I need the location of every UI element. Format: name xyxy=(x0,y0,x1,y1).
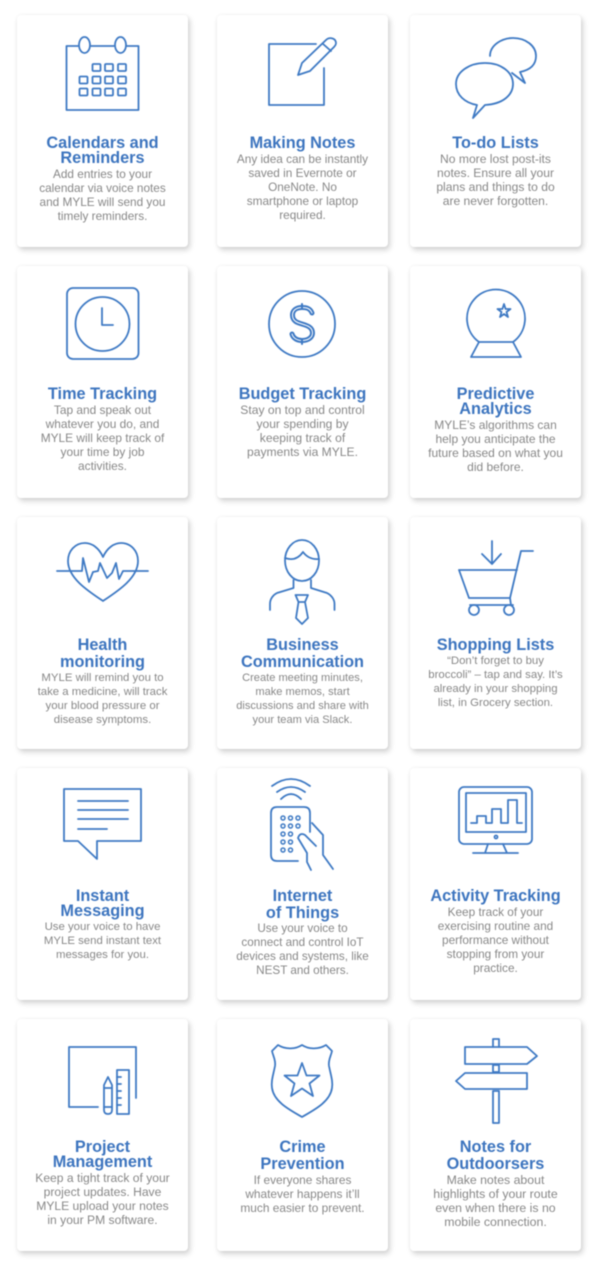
heading: Activity Tracking xyxy=(430,887,561,905)
panel: health monitoring xyxy=(17,517,188,749)
icon: clock xyxy=(65,286,140,361)
heading: Reminders xyxy=(60,149,145,167)
panel: project management xyxy=(17,1019,188,1251)
text: making notes xyxy=(236,134,368,222)
description: Create meeting minutes, xyxy=(242,672,363,684)
description: discussions and share with xyxy=(236,700,369,712)
panel: budget tracking xyxy=(217,266,388,498)
panel: to-do lists xyxy=(410,15,581,247)
heading: Business xyxy=(266,636,339,654)
heading: Outdoorsers xyxy=(447,1155,544,1173)
heading: Project xyxy=(75,1138,130,1156)
description: your team via Slack. xyxy=(253,714,352,726)
heading: Shopping Lists xyxy=(437,636,554,654)
description: MYLE will keep track of xyxy=(41,431,164,445)
icon: speech bubbles xyxy=(454,36,538,120)
description: required. xyxy=(279,208,326,222)
heading: Management xyxy=(53,1153,152,1171)
heading: Messaging xyxy=(60,902,145,920)
heading xyxy=(456,385,535,418)
description: are never forgotten. xyxy=(443,194,548,208)
description: and MYLE will send you xyxy=(40,195,165,209)
description xyxy=(428,655,563,709)
description: Add entries to your xyxy=(53,167,152,181)
icon: dollar coin xyxy=(267,289,337,359)
description: keeping track of xyxy=(260,431,345,445)
panel: notes for outdoorsers xyxy=(410,1019,581,1251)
description xyxy=(41,403,165,473)
description: calendar via voice notes xyxy=(39,181,166,195)
description: exercising routine and xyxy=(438,919,553,933)
description: MYLE send instant text xyxy=(44,935,161,947)
heading xyxy=(240,636,364,671)
description xyxy=(44,921,162,961)
description: make memos, start xyxy=(255,686,350,698)
heading xyxy=(266,887,340,922)
heading: To-do Lists xyxy=(452,134,539,152)
text: health monitoring xyxy=(37,636,168,726)
description: smartphone or laptop xyxy=(247,194,358,208)
heading: Time Tracking xyxy=(48,385,157,403)
heading: Making Notes xyxy=(250,134,355,152)
icon: message bubble xyxy=(62,787,143,860)
heading xyxy=(46,134,159,167)
description: messages for you. xyxy=(56,949,149,961)
panel: shopping lists xyxy=(410,517,581,749)
description: timely reminders. xyxy=(58,209,147,223)
text: activity tracking xyxy=(410,889,581,975)
description xyxy=(236,152,368,222)
heading: Notes for xyxy=(460,1138,531,1156)
description: NEST and others. xyxy=(256,964,349,977)
heading xyxy=(217,1139,388,1173)
description: mobile connection. xyxy=(444,1215,547,1229)
description: Any idea can be instantly xyxy=(237,152,368,166)
description: list, in Grocery section. xyxy=(438,697,553,709)
icon: calendar xyxy=(64,35,140,112)
panel: activity tracking xyxy=(410,768,581,1000)
description: performance without xyxy=(442,933,549,947)
description xyxy=(217,1173,388,1215)
heading: monitoring xyxy=(60,653,145,671)
description xyxy=(236,672,369,726)
description xyxy=(410,905,581,975)
description: Keep a tight track of your xyxy=(35,1171,170,1185)
text: notes for outdoorsers xyxy=(410,1140,581,1229)
description: much easier to prevent. xyxy=(240,1201,365,1215)
description: stopping from your xyxy=(447,947,544,961)
description: take a medicine, will track xyxy=(38,686,167,698)
description: your spending by xyxy=(256,417,349,431)
description xyxy=(410,1173,581,1229)
description: did before. xyxy=(467,460,524,474)
description: in your PM software. xyxy=(47,1213,158,1227)
description: payments via MYLE. xyxy=(247,445,358,459)
panel: predictive analytics xyxy=(410,266,581,498)
text: calendars and reminders xyxy=(39,134,166,223)
description: “Don’t forget to buy xyxy=(447,655,544,667)
panel: business communication xyxy=(217,517,388,749)
text: instant messaging xyxy=(44,887,162,961)
text: time tracking xyxy=(41,385,165,473)
heading: Prevention xyxy=(260,1155,345,1173)
panel: time tracking xyxy=(17,266,188,498)
description: notes. Ensure all your xyxy=(437,166,554,180)
description: Tap and speak out xyxy=(54,403,151,417)
description xyxy=(17,1171,188,1227)
icon: businessman xyxy=(268,538,336,626)
heading xyxy=(17,1140,188,1170)
description: devices and systems, like xyxy=(236,950,369,963)
heading xyxy=(410,1139,581,1173)
panel: internet of things xyxy=(217,768,388,1000)
text: business communication xyxy=(236,636,369,726)
description: broccoli” – tap and say. It’s xyxy=(428,669,563,681)
description: Use your voice to have xyxy=(45,921,160,933)
heading xyxy=(60,636,145,672)
description: already in your shopping xyxy=(433,683,558,695)
description: future based on what you xyxy=(428,446,563,460)
description xyxy=(236,922,369,977)
icon: remote control in hand xyxy=(269,777,334,872)
icon: signpost xyxy=(452,1035,542,1127)
description xyxy=(428,418,563,474)
panel: calendars and reminders xyxy=(17,15,188,247)
heading: Communication xyxy=(241,653,364,671)
text: to-do lists xyxy=(436,134,555,208)
description: even when there is no xyxy=(435,1201,556,1215)
description: highlights of your route xyxy=(433,1187,558,1201)
description xyxy=(37,672,168,726)
description: your time by job xyxy=(61,445,144,459)
icon: note and pencil xyxy=(267,36,338,107)
heading: Analytics xyxy=(459,400,532,418)
panel: making notes xyxy=(217,15,388,247)
description: Use your voice to xyxy=(257,922,348,935)
description: whatever happens it’ll xyxy=(245,1187,360,1201)
description: MYLE will remind you to xyxy=(41,672,164,684)
panel: instant messaging xyxy=(17,768,188,1000)
description: No more lost post-its xyxy=(440,152,551,166)
heading: Budget Tracking xyxy=(239,385,366,403)
heading: Predictive xyxy=(457,385,534,403)
description: connect and control IoT xyxy=(241,936,364,949)
heading xyxy=(60,887,145,920)
description: Keep track of your xyxy=(448,905,543,919)
heading: Calendars and xyxy=(46,134,159,152)
description: Make notes about xyxy=(447,1173,544,1187)
description xyxy=(39,167,166,223)
description xyxy=(240,403,365,459)
description: help you anticipate the xyxy=(435,432,556,446)
description: project updates. Have xyxy=(44,1185,161,1199)
description: saved in Evernote or xyxy=(248,166,357,180)
text: internet of things xyxy=(236,887,369,977)
icon: shopping cart xyxy=(458,540,534,617)
description: plans and things to do xyxy=(436,180,555,194)
description: practice. xyxy=(473,961,518,975)
icon: heart with pulse xyxy=(56,541,150,602)
icon: monitor with chart xyxy=(457,785,534,855)
text: budget tracking xyxy=(239,385,366,459)
heading: of Things xyxy=(266,904,339,922)
text: shopping lists xyxy=(428,636,563,709)
description: activities. xyxy=(78,459,127,473)
text: project management xyxy=(17,1140,188,1227)
icon: police badge xyxy=(268,1040,336,1120)
text: predictive analytics xyxy=(428,385,563,474)
description: your blood pressure or xyxy=(46,700,159,712)
text: crime prevention xyxy=(217,1140,388,1215)
icon: crystal ball xyxy=(465,288,527,359)
icon: sheet with pencil and ruler xyxy=(64,1042,140,1118)
heading: Instant xyxy=(76,887,129,905)
description: If everyone shares xyxy=(254,1173,351,1187)
description: OneNote. No xyxy=(268,180,337,194)
description: MYLE’s algorithms can xyxy=(434,418,557,432)
description: Stay on top and control xyxy=(240,403,365,417)
description xyxy=(436,152,555,208)
panel: crime prevention xyxy=(217,1019,388,1251)
heading: Crime xyxy=(279,1138,326,1156)
description: whatever you do, and xyxy=(46,417,159,431)
description: disease symptoms. xyxy=(54,714,151,726)
description: MYLE upload your notes xyxy=(36,1199,169,1213)
heading: Internet xyxy=(273,887,332,905)
heading: Health xyxy=(78,636,127,654)
